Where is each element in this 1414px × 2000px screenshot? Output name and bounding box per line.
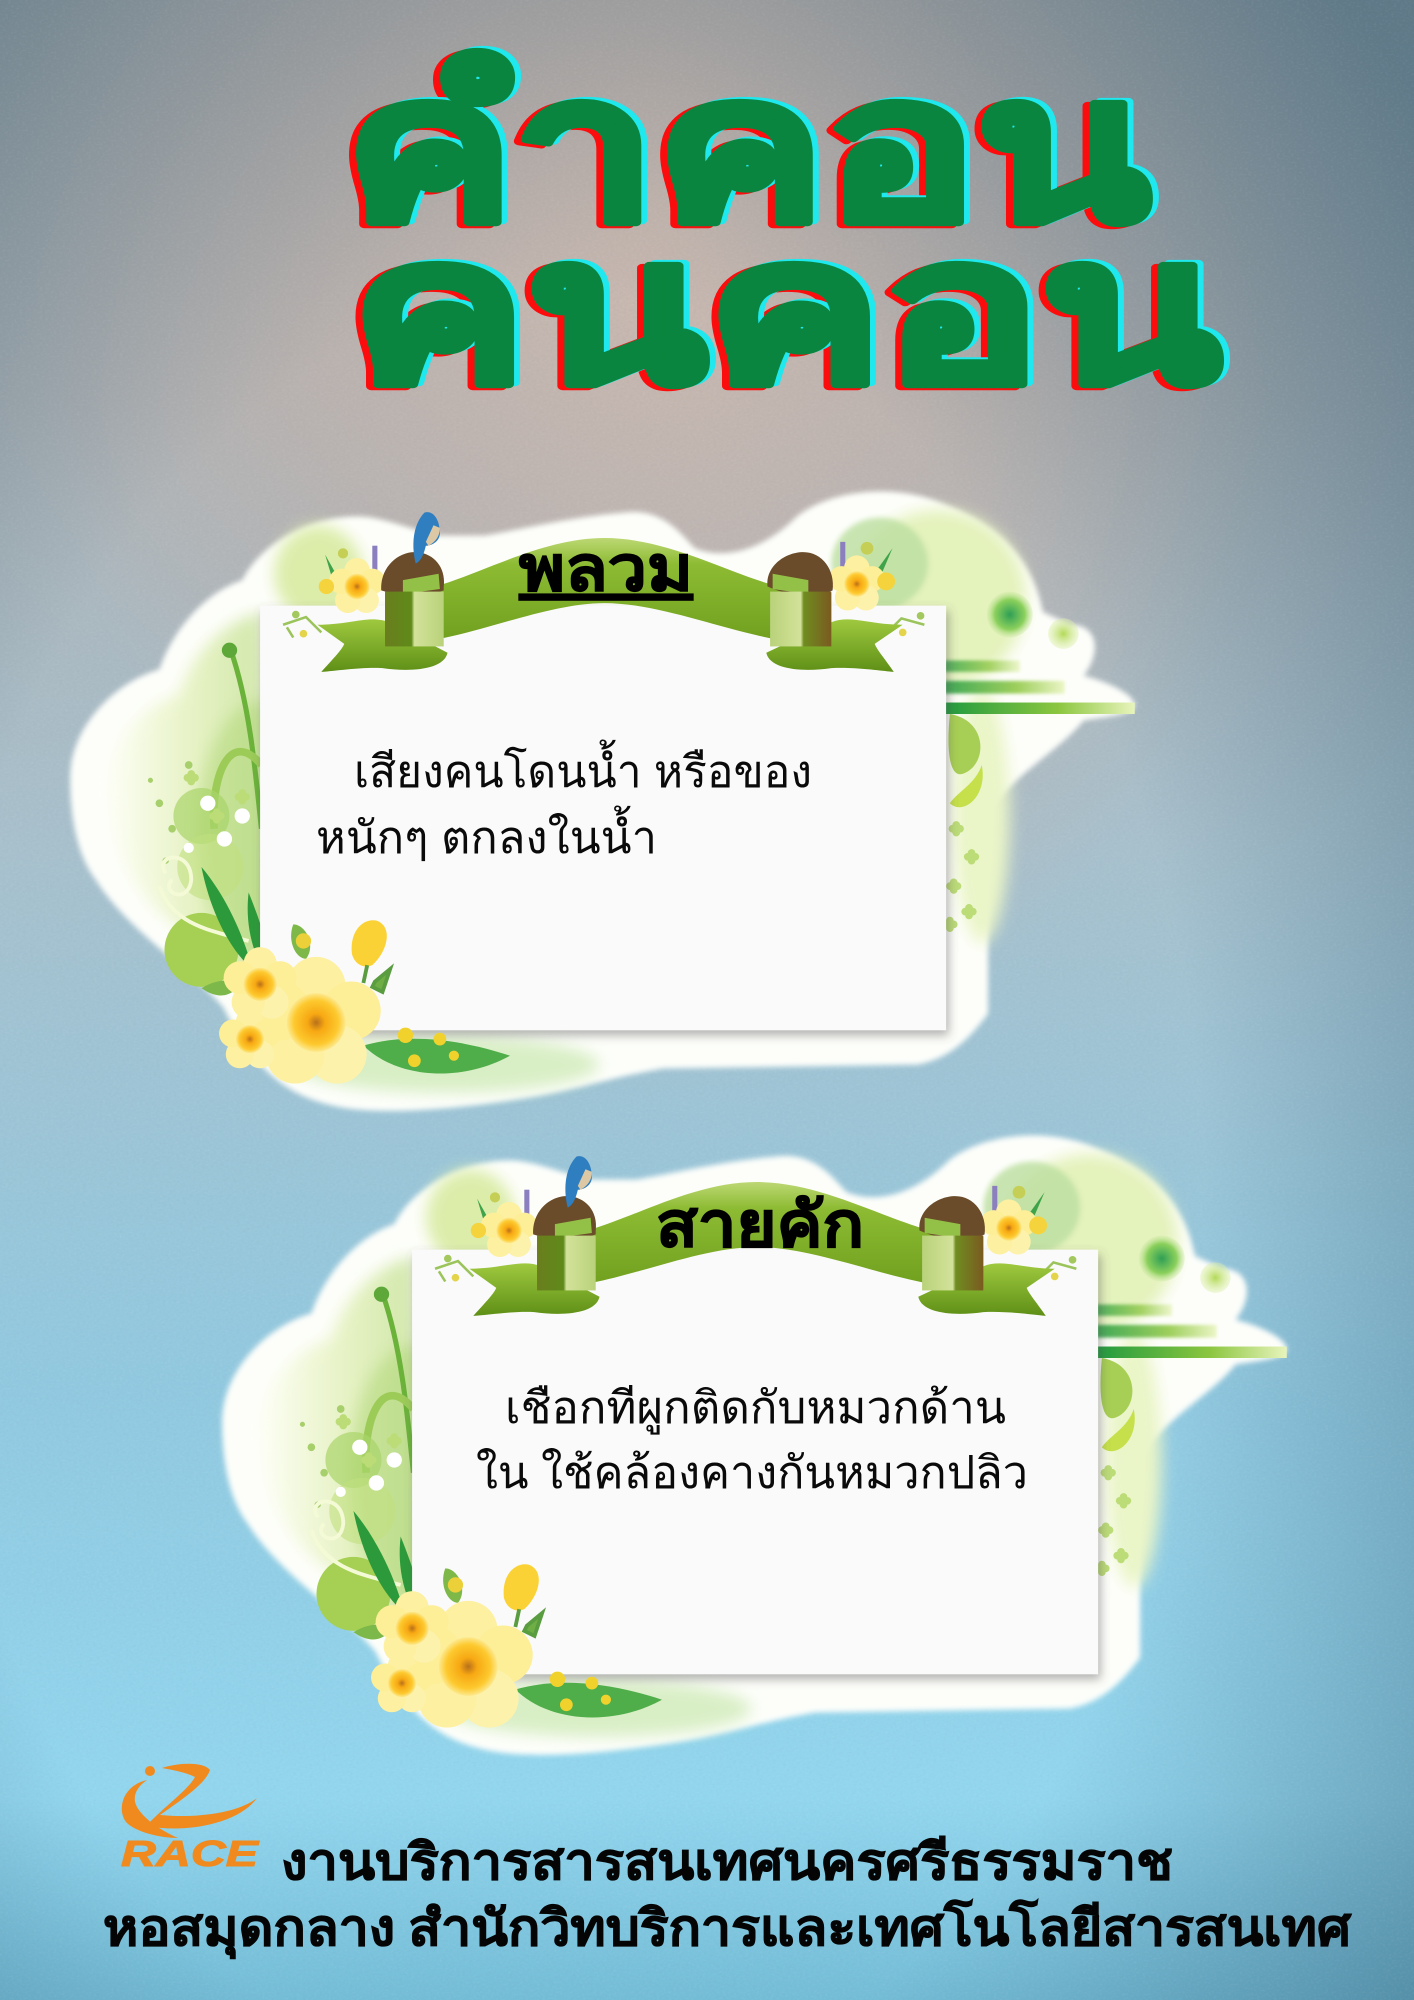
heading: สายคัก: สายคัก <box>656 1192 864 1260</box>
panel artwork: frame, ribbon and flowers <box>70 491 1135 1111</box>
title line: คนคอน: คนคอน <box>351 203 1221 425</box>
title line: คำคอน: คำคอน <box>345 41 1150 263</box>
panel: สายคัก <box>222 1135 1287 1755</box>
footer line 2: หอสมุดกลาง สำนักวิทบริการและเทศโนโลยีสารสนเทศ <box>103 1898 1352 1959</box>
footer text <box>103 1834 1352 1959</box>
panel: พลวม <box>70 491 1135 1111</box>
text block: definition: เชือกทีผูกติดกับหมวกด้าน <box>505 1382 1006 1435</box>
logo wordmark: RACE <box>121 1833 259 1874</box>
text block: definition <box>316 739 812 863</box>
title line: คนคอน <box>344 201 1227 427</box>
title line: คนคอน: คนคอน <box>357 201 1227 423</box>
text block: definition: หนักๆ ตกลงในน้ำ <box>316 805 657 863</box>
footer line 1: งานบริการสารสนเทศนครศรีธรรมราช <box>281 1834 1173 1890</box>
heading: พลวม: พลวม <box>519 536 693 604</box>
title <box>338 39 1227 427</box>
panel artwork: frame, ribbon and flowers <box>222 1135 1287 1755</box>
text block: definition: เสียงคนโดนน้ำ หรือของ <box>354 739 812 797</box>
title line: คนคอน: คนคอน <box>344 205 1214 427</box>
logo: RACE <box>121 1764 259 1874</box>
text block: definition: ใน ใช้คล้องคางกันหมวกปลิว <box>476 1447 1028 1498</box>
title line: คำคอน: คำคอน <box>351 39 1156 261</box>
title line: คำคอน <box>338 39 1156 265</box>
text block: definition <box>476 1382 1028 1498</box>
title line: คำคอน: คำคอน <box>338 43 1143 265</box>
